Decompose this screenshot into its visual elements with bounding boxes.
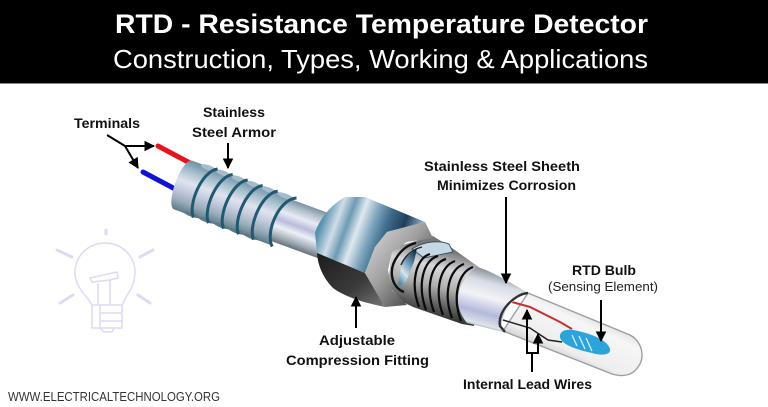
label: internal lead wires: Internal Lead Wires	[463, 376, 592, 392]
label: RTD bulb: RTD Bulb	[572, 262, 636, 278]
neck	[388, 236, 480, 326]
blue wire	[143, 172, 177, 190]
label: adjustable compression fitting: Compression Fitting	[286, 352, 429, 368]
threads	[415, 254, 473, 321]
black lead wire	[503, 320, 562, 342]
sensing coil	[560, 330, 610, 355]
label: RTD bulb: (Sensing Element)	[548, 279, 658, 294]
label: terminals	[74, 115, 154, 168]
label: adjustable compression fitting: Adjustable	[319, 332, 395, 348]
title: RTD - Resistance Temperature Detector	[115, 9, 649, 39]
compression nut	[315, 197, 433, 307]
hole	[398, 248, 417, 286]
dark lower face	[317, 253, 385, 307]
chamfer collar	[365, 222, 433, 307]
footer url: WWW.ELECTRICALTECHNOLOGY.ORG	[8, 390, 220, 404]
header banner	[0, 0, 768, 84]
label: stainless steel sheath: Stainless Steel Sheeth	[424, 158, 580, 174]
red lead wire	[512, 302, 572, 329]
glass bulb tube	[503, 293, 642, 376]
label: terminals: Terminals	[74, 115, 140, 131]
arrow: terminals	[107, 135, 154, 168]
red wire	[158, 146, 190, 163]
armor bumps	[183, 163, 295, 248]
label: stainless steel sheath: Minimizes Corrosion	[437, 177, 576, 193]
icon: light bulb	[57, 230, 153, 332]
armor threads	[188, 165, 296, 249]
stainless steel armor	[166, 156, 297, 249]
label: stainless steel armor: Stainless	[203, 104, 265, 120]
connecting pipe	[265, 196, 349, 264]
label: stainless steel armor: Steel Armor	[192, 124, 277, 140]
label: stainless steel sheath	[424, 158, 580, 283]
label: adjustable compression fitting	[286, 297, 429, 368]
blue faces	[315, 197, 425, 273]
terminal wires	[143, 146, 190, 190]
label: RTD bulb	[548, 262, 658, 341]
label: stainless steel armor	[192, 104, 277, 168]
neck ring	[392, 243, 416, 292]
label: internal lead wires	[463, 310, 592, 392]
top opening	[412, 242, 453, 258]
stainless steel sheath	[458, 267, 528, 332]
threaded body	[388, 236, 480, 326]
subtitle: Construction, Types, Working & Applications	[113, 44, 648, 74]
